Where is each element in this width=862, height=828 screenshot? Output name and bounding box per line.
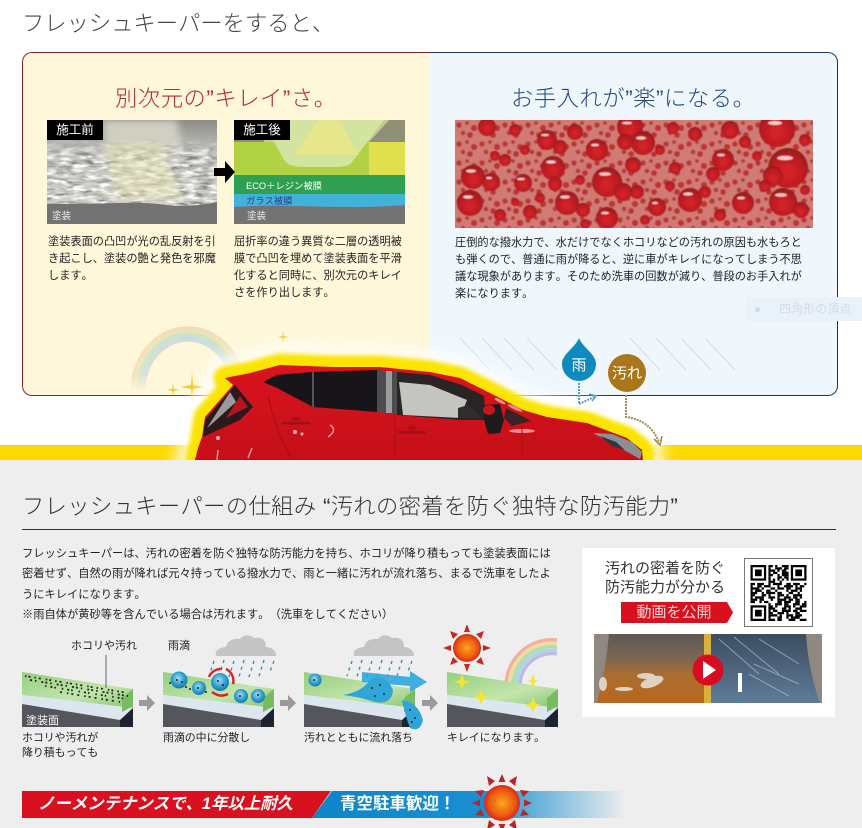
text: mechanism description: フレッシュキーパーは、汚れの密着を防ぐ独特な防汚能力を持ち、ホコリが降り積もっても塗装表面には — [22, 548, 551, 560]
arrow: dirt slides — [626, 395, 662, 445]
QR code — [744, 558, 813, 627]
video thumbnail — [594, 634, 822, 703]
diagram: four steps — [22, 625, 558, 730]
rain drop badge — [562, 338, 596, 381]
rain drop badge: 雨 — [571, 357, 587, 374]
text: after description — [234, 235, 402, 299]
car halo white — [195, 365, 643, 470]
dirt badge: 汚れ — [612, 365, 642, 382]
front side window — [399, 382, 467, 418]
text: video card message: 防汚能力が分かる — [605, 579, 725, 596]
rear windows — [263, 370, 377, 412]
text: easy care description: 楽になります。 — [455, 288, 533, 300]
text: after description: 屈折率の違う異質な二層の透明被 — [234, 236, 402, 248]
label: video published: 動画を公開 — [636, 604, 712, 621]
caption: step 1 — [22, 732, 98, 759]
label: after: 施工後 — [243, 123, 281, 137]
wing mirror — [484, 404, 504, 434]
text: mechanism description — [22, 547, 551, 621]
label: video published — [621, 602, 733, 623]
text: easy care description — [455, 236, 802, 300]
arrows between steps — [139, 695, 438, 711]
caption: step 1: ホコリや汚れが — [22, 732, 98, 744]
text: easy care description: も弾くので、普通に雨が降ると、逆に車がキレイになってしまう不思 — [455, 254, 802, 266]
banner: no maintenance: ノーメンテナンスで、1年以上耐久 — [38, 795, 293, 813]
front window frame — [397, 372, 486, 420]
icon: sun — [472, 774, 532, 828]
windshield dark patch — [504, 408, 531, 426]
label: paint: 塗装 — [52, 210, 72, 222]
illustration: rainbow, rain and car — [130, 326, 736, 460]
text: before description: 塗装表面の凸凹が光の乱反射を引 — [48, 236, 216, 248]
panel: video card — [582, 548, 835, 717]
label: dust and dirt: ホコリや汚れ — [71, 640, 137, 652]
panel: left cream background — [22, 52, 429, 396]
hood reflections — [509, 429, 535, 433]
label: raindrop: 雨滴 — [168, 640, 190, 652]
heading: mechanism: フレッシュキーパーの仕組み “汚れの密着を防ぐ独特な防汚能力” — [22, 494, 678, 519]
car body — [195, 365, 643, 460]
step 4: clean with sun and rainbow — [443, 624, 558, 727]
image: after treatment: 塗装 — [247, 210, 267, 222]
heading: beauty: 別次元の”キレイ”さ。 — [115, 86, 337, 111]
text: after description: 化すると同時に、別次元のキレイ — [234, 270, 402, 282]
label: painted surface: 塗装面 — [26, 714, 59, 727]
faint overlay tag: ● 四角形の頂点 — [754, 302, 851, 316]
text: after description: さを作り出します。 — [234, 287, 335, 299]
faint overlay tag — [746, 297, 862, 321]
rainbow — [132, 328, 244, 390]
page title: フレッシュキーパーをすると、 — [22, 11, 334, 36]
text: video card message — [605, 560, 725, 596]
yellow band: left — [0, 445, 200, 460]
caption: step 2: 雨滴の中に分散し — [163, 732, 250, 744]
heading: easy care: お手入れが”楽”になる。 — [511, 86, 755, 111]
arrow: before to after — [214, 161, 235, 183]
dirt badge — [608, 354, 646, 392]
label: film layers: ECO＋レジン被膜 — [246, 180, 322, 191]
banner: no maintenance — [22, 791, 331, 818]
text: easy care description: 圧倒的な撥水力で、水だけでなくホコリなどの汚れの原因も水もろと — [455, 237, 802, 249]
label: before — [47, 120, 103, 140]
step 2: raindrops disperse dirt — [163, 635, 276, 727]
text: after description: 膜で凸凹を埋めて塗装表面を平滑 — [234, 253, 402, 265]
label: after — [234, 120, 290, 140]
sparkles — [167, 331, 288, 402]
caption: step 3: 汚れとともに流れ落ち — [304, 732, 413, 744]
car halo yellow — [195, 365, 643, 470]
caption: step 4: キレイになります。 — [447, 732, 545, 744]
yellow band: right — [650, 445, 862, 460]
rain streaks — [460, 338, 735, 370]
headlight — [593, 433, 642, 459]
image: after treatment: ガラス被膜 — [246, 195, 292, 206]
text: mechanism description: ※雨自体が黄砂等を含んでいる場合は汚れます。（洗車をしてください） — [22, 609, 393, 621]
text: before description — [48, 235, 216, 282]
text: before description: き起こし、塗装の艶と発色を邪魔 — [48, 253, 216, 265]
arrow: rain bounces — [579, 383, 596, 404]
text: video card message: 汚れの密着を防ぐ — [605, 560, 725, 577]
banner: outdoor parking welcome — [312, 791, 626, 818]
section: mechanism background — [0, 460, 862, 828]
label: before: 施工前 — [56, 123, 94, 137]
caption: step 1: 降り積もっても — [22, 747, 98, 759]
play button — [692, 654, 724, 686]
door lines and handles — [268, 395, 522, 460]
text: mechanism description: 密着せず、自然の雨が降れば元々持っている撥水力で、雨と一緒に汚れが流れ落ち、まるで洗車をしたよ — [22, 568, 551, 580]
heading rule — [22, 529, 836, 530]
text: before description: します。 — [48, 270, 93, 282]
image: before treatment — [47, 120, 217, 224]
step 1: dust on surface — [22, 655, 133, 727]
text: easy care description: 議な現象があります。そのため洗車の回数が減り、普段のお手入れが — [455, 271, 802, 283]
image: water droplets on red paint — [455, 120, 813, 228]
step 3: dirt flows away — [304, 635, 427, 729]
text: mechanism description: うにキレイになります。 — [22, 589, 146, 601]
panel: right blue background — [429, 52, 838, 396]
pillar — [377, 370, 397, 414]
image: after treatment — [234, 120, 405, 224]
banner: outdoor parking welcome: 青空駐車歓迎！ — [340, 795, 455, 813]
rear glass and taillight — [203, 385, 253, 437]
